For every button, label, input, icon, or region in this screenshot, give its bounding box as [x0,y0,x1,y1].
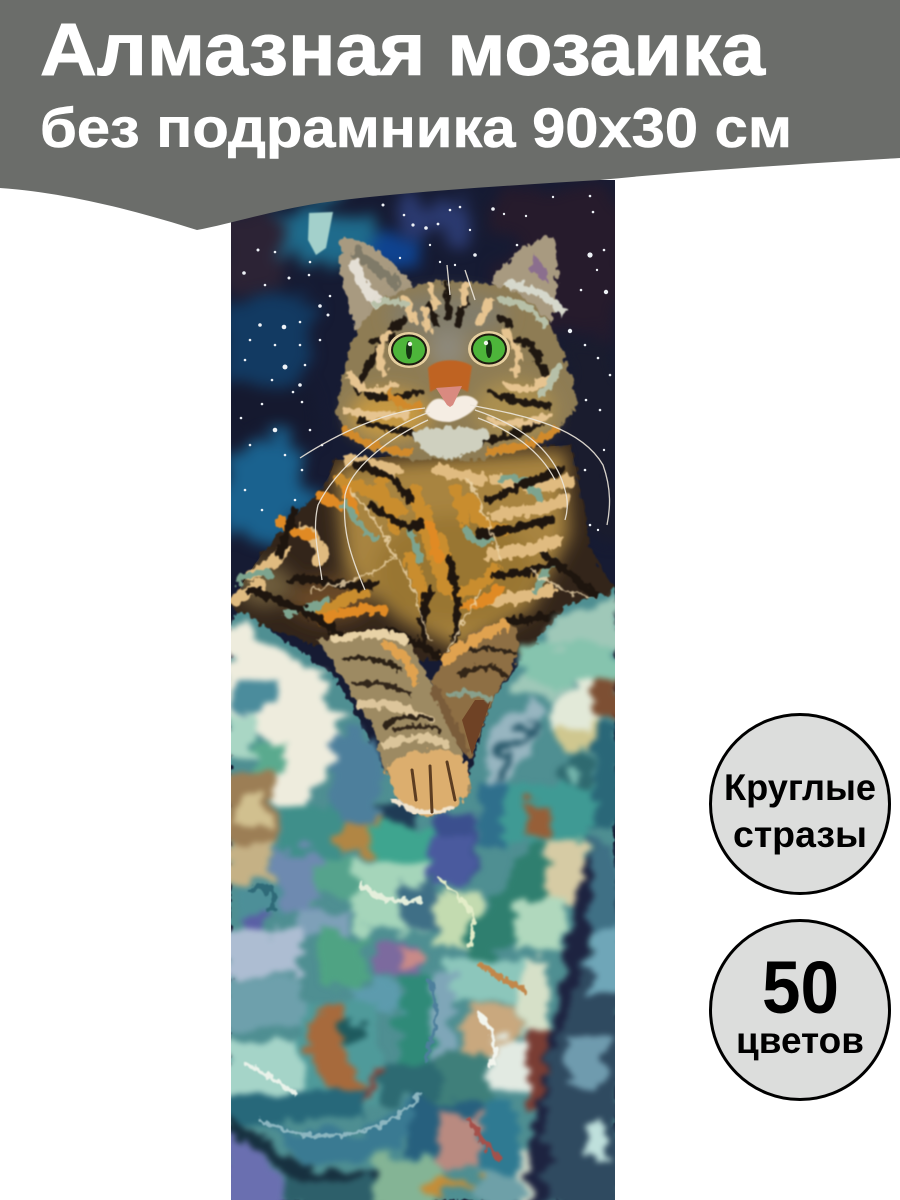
header banner [0,0,900,230]
lower blanket patches [225,840,273,882]
eyes [388,331,510,368]
nose bridge [428,360,472,392]
painting: cat on a blanket under a starry sky [225,180,623,1200]
badge: 50 colours [710,920,890,1100]
dark band [528,840,608,1200]
badge: round rhinestones: Круглые [724,767,876,808]
icon: front paw [386,750,470,816]
icon: nose [436,386,462,407]
subtitle: без подрамника 90х30 см [40,96,792,159]
stars [240,195,611,531]
whiskers [300,265,610,590]
badge: round rhinestones: стразы [733,814,867,855]
muzzle [425,396,478,422]
title: Алмазная мозаика [40,8,766,91]
blanket [225,590,622,1200]
badge: round rhinestones [710,714,890,894]
cat body [231,445,615,660]
ears [340,235,565,332]
dark sweep and corner [231,1114,382,1186]
upper-right blanket [510,595,622,700]
cat head [300,235,610,590]
forehead stripes [358,285,550,440]
night sky background [225,185,623,540]
upper-left blanket [225,625,345,815]
badge: 50 colours: цветов [736,1020,864,1061]
ornament [300,1005,380,1105]
badge: 50 colours: 50 [762,946,839,1029]
cat front legs and paws [318,623,518,816]
chin [412,426,490,458]
